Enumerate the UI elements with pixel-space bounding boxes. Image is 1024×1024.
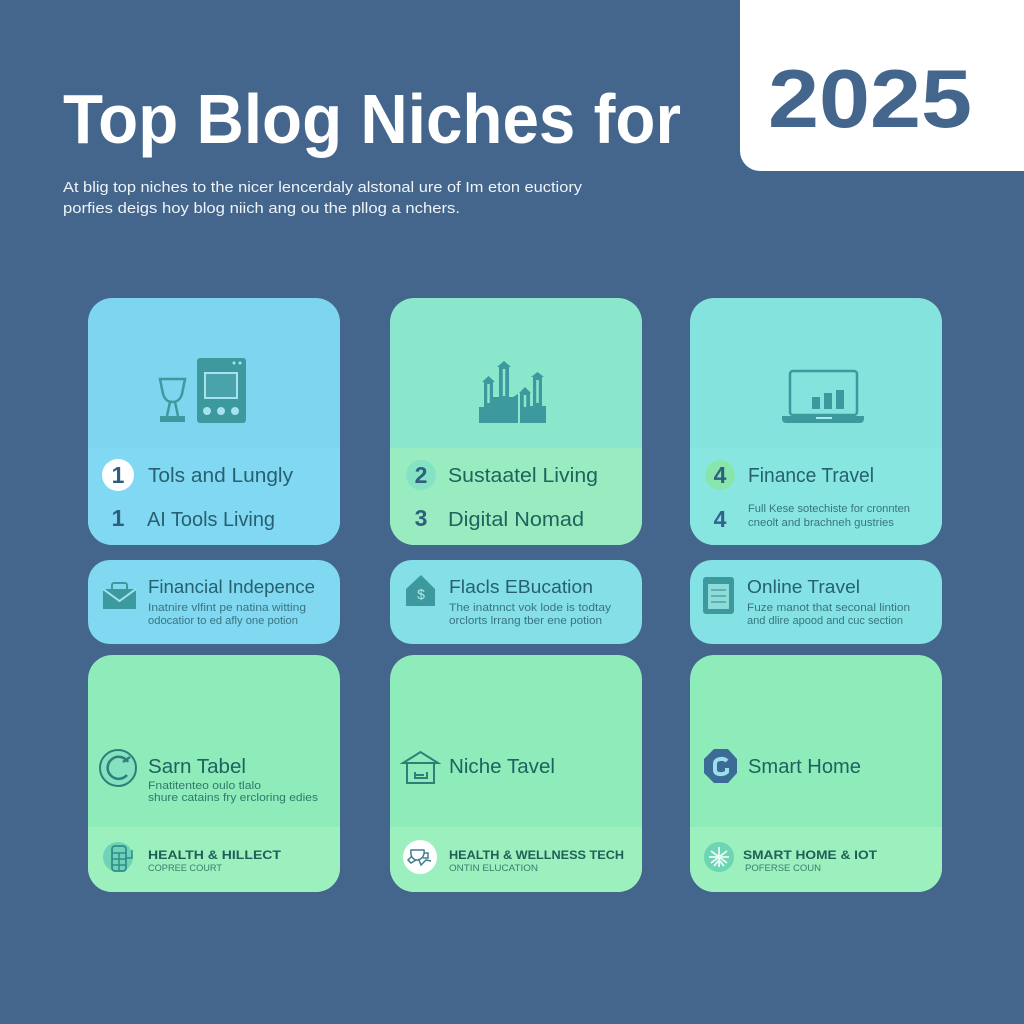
panel: education [390,560,642,644]
niche label: Tols and Lungly [148,465,293,487]
year badge [740,0,1024,171]
title: Top Blog Niches for [63,80,681,158]
niche description [748,503,910,529]
number badge 1 [102,459,134,491]
caption [743,848,878,874]
niche description: Full Kese sotechiste for cronnten [748,503,910,515]
description [148,780,319,804]
description: odocatior to ed afly one potion [148,615,298,627]
heading: Sarn Tabel [148,756,246,778]
icon: briefcase [103,583,136,609]
caption [148,848,282,874]
niche label: AI Tools Living [147,509,275,531]
icon: clipboard [703,577,734,614]
icon: wellness [403,840,437,874]
niche description: cneolt and brachneh gustries [748,517,895,529]
caption: SMART HOME & IOT [743,848,878,862]
heading: Flacls EBucation [449,576,593,597]
panel: card 2 top [390,298,642,545]
number badge 4: 4 [714,462,727,488]
caption: COPREE COURT [148,863,222,874]
year badge: 2025 [768,52,972,145]
heading: Online Travel [747,576,860,597]
panel: card 1 bottom [88,655,340,892]
icon: smart home hexagon [704,749,737,783]
icon: circular C [100,750,136,786]
panel: online travel [690,560,942,644]
icon: IoT burst [704,842,734,872]
number badge 2: 2 [415,462,427,488]
description [148,602,306,627]
panel: card 2 bottom [390,655,642,892]
niche label: Digital Nomad [448,509,584,531]
caption [449,848,624,874]
number badge 1: 1 [112,462,125,488]
description: The inatnnct vok lode is todtay [449,602,612,614]
heading: Financial Indepence [148,576,315,597]
number badge 2 [406,460,436,490]
description: Fnatitenteo oulo tlalo [148,780,261,792]
icon: factory towers [479,361,546,423]
description [747,602,910,627]
caption: HEALTH & WELLNESS TECH [449,848,624,862]
icon: glass and tablet [160,358,246,423]
subtitle: At blig top niches to the nicer lencerdaly alstonal ure of Im eton euctiory [63,179,583,196]
panel: card 3 bottom [690,655,942,892]
heading: Smart Home [748,756,861,778]
description: orclorts lrrang tber ene potion [449,615,602,627]
icon: house with dollar [406,575,435,606]
icon: home outline [403,752,438,783]
description: and dlire apood and cuc section [747,615,903,627]
heading: Niche Tavel [449,756,555,778]
caption: HEALTH & HILLECT [148,848,282,862]
number 3: 3 [415,505,427,531]
description: Inatnire vlfint pe natina witting [148,602,306,614]
caption: ONTIN ELUCATION [449,863,538,874]
description: Fuze manot that seconal lintion [747,602,910,614]
icon: health device [103,842,133,872]
subtitle: porfies deigs hoy blog niich ang ou the pllog a nchers. [63,200,460,217]
subtitle [63,179,583,217]
caption: POFERSE COUN [745,863,821,874]
niche label: Finance Travel [748,465,874,487]
number 1: 1 [112,505,125,531]
number 4: 4 [714,506,727,532]
description [449,602,612,627]
description: shure catains fry ercloring edies [148,792,319,804]
number badge 4 [705,460,735,490]
icon: laptop with chart [782,371,864,423]
icon: house with dollar: $ [417,586,425,602]
niche label: Sustaatel Living [448,465,598,487]
panel: card 3 top [690,298,942,545]
panel: card 1 top [88,298,340,545]
panel: financial independence [88,560,340,644]
